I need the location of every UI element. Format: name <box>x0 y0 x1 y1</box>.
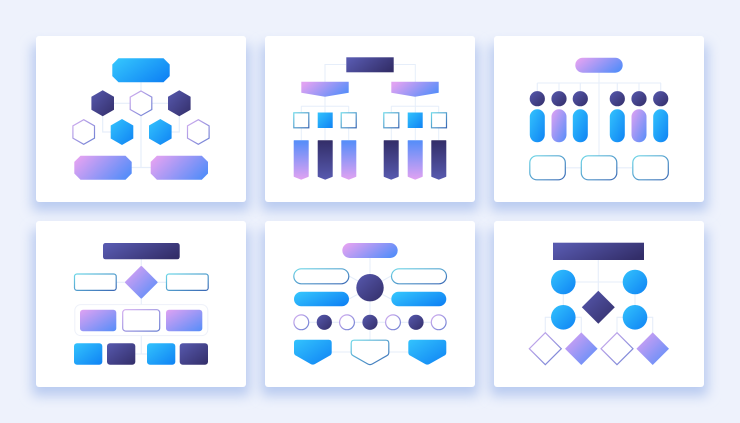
vertical pills <box>530 109 668 142</box>
card <box>36 221 246 387</box>
card shadow <box>261 229 479 396</box>
panel: hexagon hierarchy <box>32 36 250 211</box>
top rectangle <box>103 243 180 259</box>
left pills <box>294 269 349 306</box>
bottom octagons <box>74 156 208 180</box>
panel: circles and diamonds <box>490 221 708 396</box>
connectors <box>545 260 653 333</box>
top rectangle <box>346 57 394 72</box>
small circle row <box>294 315 446 330</box>
card <box>494 221 704 387</box>
panel: pill columns <box>490 36 708 211</box>
grouped row <box>75 305 208 336</box>
right pills <box>391 269 446 306</box>
card shadow <box>32 44 250 211</box>
connectors <box>537 72 661 168</box>
connectors <box>117 259 166 354</box>
top pill <box>575 58 623 73</box>
blue circles <box>551 270 647 330</box>
card <box>265 221 475 387</box>
bottom diamonds <box>529 332 669 365</box>
outlined rounded boxes <box>530 156 668 180</box>
card shadow <box>490 229 708 396</box>
vertical bars <box>294 141 446 179</box>
connectors <box>103 82 179 168</box>
square row <box>294 112 446 128</box>
card <box>494 36 704 202</box>
panel: diamond and group <box>32 221 250 396</box>
connectors <box>301 258 439 352</box>
dark circles <box>530 91 668 106</box>
bottom row <box>74 343 208 365</box>
center diamond <box>582 291 615 324</box>
top rectangle <box>553 243 644 260</box>
card shadow <box>32 229 250 396</box>
card shadow <box>261 44 479 211</box>
panel: banner tree <box>261 36 479 211</box>
card <box>265 36 475 202</box>
card <box>36 36 246 202</box>
pentagon banners <box>301 82 439 97</box>
top octagon <box>112 58 170 82</box>
connectors <box>301 64 439 140</box>
card shadow <box>490 44 708 211</box>
hexagon row one <box>91 90 191 116</box>
pentagon shields <box>294 340 446 365</box>
top pill <box>342 243 398 258</box>
hub circle <box>356 274 384 301</box>
outlined boxes and diamond <box>74 267 208 298</box>
hexagon row two <box>73 119 209 145</box>
panel: circle hub <box>261 221 479 396</box>
